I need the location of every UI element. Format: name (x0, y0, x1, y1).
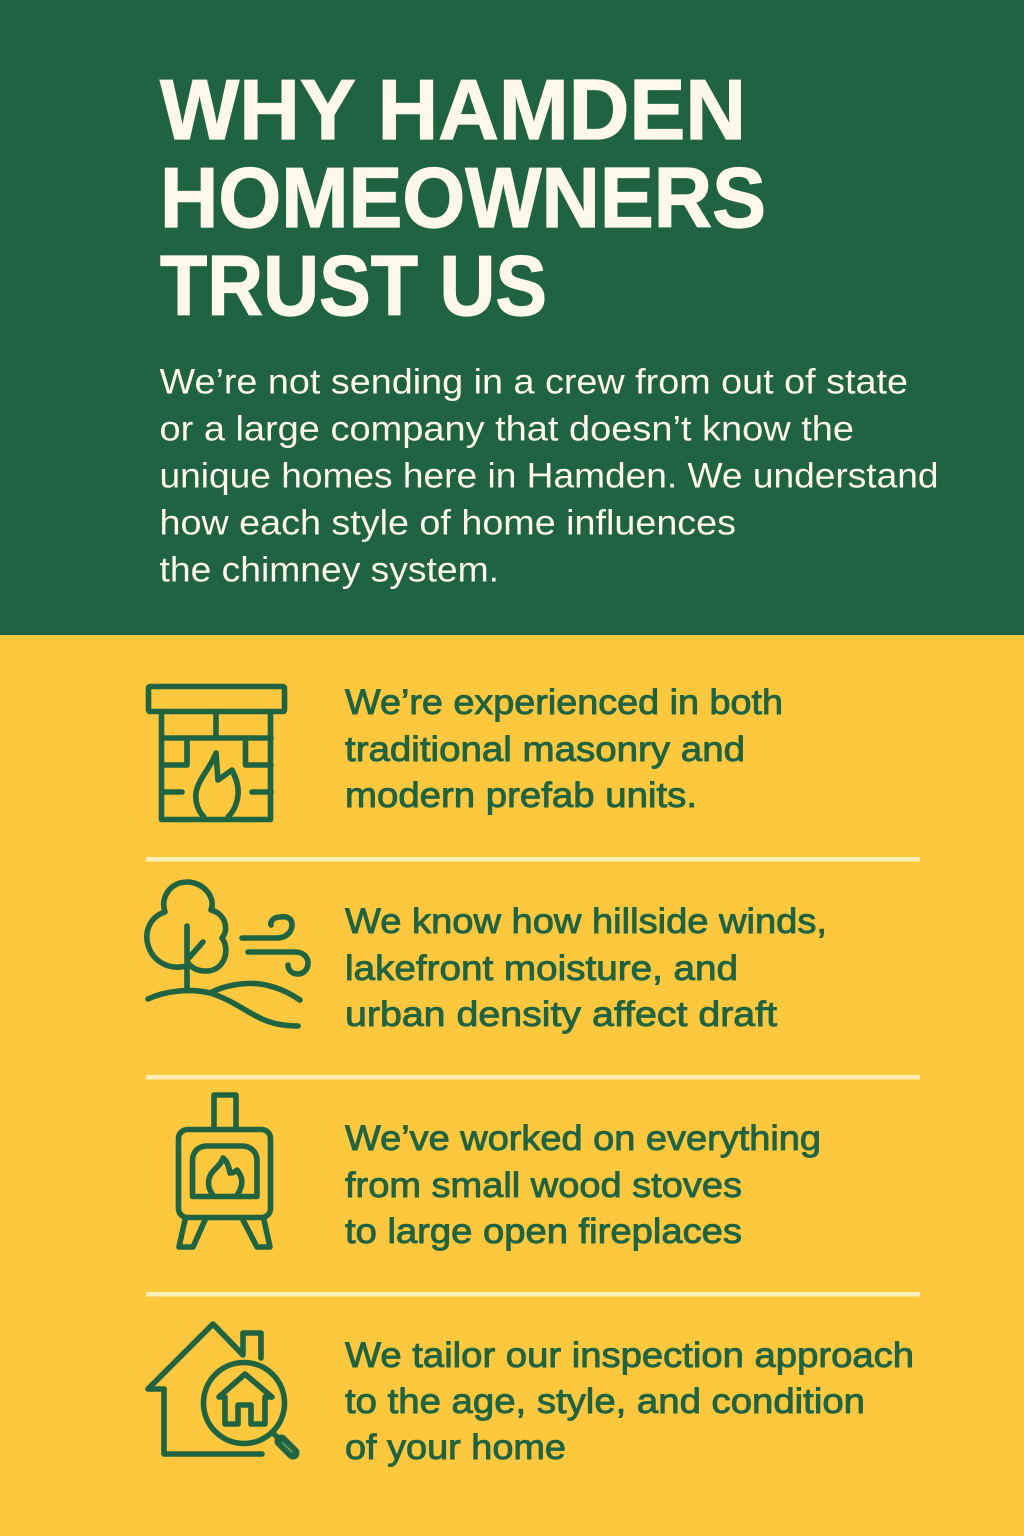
reason text: tailored inspection (345, 1336, 914, 1467)
reason text: stoves to fireplaces: to large open fireplaces (345, 1212, 742, 1251)
panel: header (0, 0, 1024, 635)
intro text block (160, 362, 938, 590)
reason text: stoves to fireplaces: from small wood stoves (345, 1166, 742, 1205)
reason text: stoves to fireplaces: We’ve worked on everything (345, 1119, 821, 1158)
title: HOMEOWNERS (160, 151, 766, 246)
intro text block: unique homes here in Hamden. We understand (160, 456, 938, 496)
reason text: tailored inspection: We tailor our inspection approach (345, 1336, 914, 1375)
reason text: winds, moisture, density: lakefront moisture, and (345, 949, 738, 988)
intro text block: the chimney system. (160, 550, 499, 590)
reason text: masonry and prefab: traditional masonry and (345, 730, 745, 769)
reason text: tailored inspection: to the age, style, and condition (345, 1382, 865, 1421)
reason text: winds, moisture, density (345, 902, 827, 1034)
panel: reasons list (0, 635, 1024, 1536)
reason text: tailored inspection: of your home (345, 1428, 566, 1467)
reason text: winds, moisture, density: urban density affect draft (345, 995, 777, 1034)
intro text block: how each style of home influences (160, 504, 736, 542)
icon: brick fireplace with flame (148, 686, 284, 820)
intro text block: or a large company that doesn’t know the (160, 410, 854, 448)
reason text: stoves to fireplaces (345, 1119, 821, 1251)
icon: tree, wind and hills (147, 882, 308, 1026)
icon: house with magnifying glass (148, 1324, 293, 1454)
title: WHY HAMDEN (160, 63, 746, 158)
title (160, 63, 766, 334)
intro text block: We’re not sending in a crew from out of state (160, 362, 908, 402)
reason text: winds, moisture, density: We know how hillside winds, (345, 902, 827, 941)
reason text: masonry and prefab (345, 683, 783, 815)
reason text: masonry and prefab: modern prefab units. (345, 776, 697, 815)
reason text: masonry and prefab: We’re experienced in both (345, 683, 783, 722)
title: TRUST US (160, 239, 547, 334)
icon: wood stove (178, 1095, 270, 1247)
